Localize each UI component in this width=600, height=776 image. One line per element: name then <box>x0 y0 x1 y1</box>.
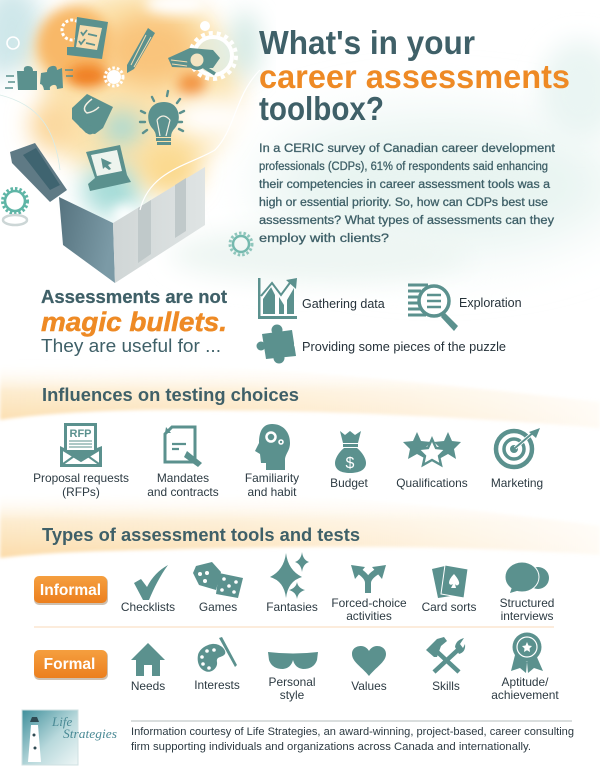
informal: fantasies: Fantasies <box>266 600 318 614</box>
informal: checklists: Checklists <box>121 600 175 614</box>
formal: personal style <box>268 652 318 702</box>
heading: influences: Influences on testing choices <box>42 384 299 405</box>
formal: personal style: style <box>280 688 305 702</box>
icon: projector with magnifier <box>168 48 220 74</box>
icon: dice <box>193 562 243 598</box>
button: informal <box>34 576 108 605</box>
intro paragraph <box>259 141 556 245</box>
influence: qualifications <box>396 432 468 490</box>
footer text: firm supporting individuals and organizations across Canada and internationally. <box>131 741 531 753</box>
informal: games: Games <box>199 600 237 614</box>
icon: puzzle piece <box>256 324 300 364</box>
formal: aptitude: Aptitude/ <box>502 675 549 689</box>
influence: mandates <box>147 427 219 499</box>
intro paragraph: their competencies in career assessment tools was a <box>259 177 550 191</box>
icon: puzzle pieces <box>5 66 73 90</box>
footer text: Information courtesy of Life Strategies, an award-winning, project-based, career consulting <box>131 726 574 738</box>
footer rule <box>131 720 572 722</box>
icon: checklist <box>67 17 108 59</box>
influence: budget <box>330 431 369 490</box>
icon: hammer and wrench <box>426 637 465 672</box>
informal: fantasies <box>266 552 318 614</box>
informal: card sorts: Card sorts <box>422 600 476 614</box>
title: career assessments <box>259 59 570 96</box>
informal: games <box>193 562 243 614</box>
influence: proposal requests: (RFPs) <box>62 485 100 499</box>
icon: money bag: $ <box>346 455 355 472</box>
icon: check mark <box>134 565 168 600</box>
informal: structured interviews: Structured <box>500 596 554 610</box>
title: What's in your <box>259 25 475 62</box>
button: formal <box>34 650 108 680</box>
footer text <box>131 726 574 753</box>
icon: sparkles <box>270 552 309 599</box>
icon: stars <box>403 432 461 465</box>
informal: forced-choice <box>331 565 407 623</box>
influence: proposal requests <box>33 423 129 499</box>
intro paragraph: In a CERIC survey of Canadian career development <box>259 141 556 155</box>
illustration: open toolbox with flying icons <box>0 17 260 283</box>
icon: light bulb <box>140 91 184 145</box>
title <box>259 25 570 128</box>
intro paragraph: assessments? What types of assessments can they <box>259 213 555 227</box>
callout: magic bullets: They are useful for ... <box>41 335 221 356</box>
use: pieces of the puzzle <box>256 324 506 364</box>
icon: sunglasses <box>268 652 318 669</box>
use: pieces of the puzzle: Providing some pieces of the puzzle <box>302 340 506 354</box>
informal: forced-choice: Forced-choice <box>331 596 407 610</box>
intro paragraph: professionals (CDPs), 61% of respondents said enhancing <box>259 159 548 173</box>
icon: handshake <box>72 94 113 134</box>
title: toolbox? <box>259 91 384 128</box>
logo: Life Strategies: Life <box>51 714 72 729</box>
icon: lighthouse <box>28 717 41 762</box>
box lid <box>10 143 67 202</box>
formal: skills <box>426 637 465 693</box>
formal: interests <box>194 637 240 692</box>
decorative gears <box>0 20 260 255</box>
use: gathering data: Gathering data <box>302 297 385 311</box>
informal: card sorts <box>422 565 476 614</box>
icon: house <box>131 643 165 676</box>
informal: structured interviews: interviews <box>501 609 553 623</box>
influence: familiarity: Familiarity <box>245 471 299 485</box>
influence: budget: Budget <box>330 476 369 490</box>
icon: fork arrows <box>351 565 386 593</box>
callout: magic bullets: Assessments are not <box>41 286 227 307</box>
orange band top <box>0 374 598 427</box>
icon: palette <box>198 637 237 672</box>
icon: award ribbon <box>511 632 543 673</box>
use: exploration <box>408 285 522 331</box>
intro paragraph: high or essential priority. So, how can CDPs best use <box>259 195 548 209</box>
heading: types: Types of assessment tools and tests <box>42 524 360 545</box>
influence: familiarity <box>245 424 299 499</box>
formal: needs: Needs <box>131 679 165 693</box>
icon: laptop <box>86 145 131 191</box>
logo: Life Strategies: Strategies <box>63 726 117 741</box>
use: gathering data <box>258 278 385 319</box>
icon: magnifier over lines <box>408 285 458 331</box>
box body <box>59 167 205 283</box>
icon: playing cards <box>432 565 468 598</box>
influence: proposal requests: Proposal requests <box>33 471 129 485</box>
callout: magic bullets <box>41 286 227 356</box>
influence: qualifications: Qualifications <box>396 476 468 490</box>
formal: values <box>351 646 387 693</box>
icon: head with gears <box>255 424 290 470</box>
formal: aptitude <box>491 632 559 702</box>
icon: document with pen <box>165 427 202 467</box>
button: formal: Formal <box>44 656 95 673</box>
formal: needs <box>131 643 165 693</box>
icon: chart <box>258 278 297 319</box>
intro paragraph: employ with clients? <box>259 231 389 245</box>
callout: magic bullets: magic bullets. <box>41 307 227 337</box>
icon: target <box>496 428 540 467</box>
influence: mandates: and contracts <box>147 485 219 499</box>
divider <box>34 626 554 628</box>
formal: values: Values <box>351 679 387 693</box>
informal: forced-choice: activities <box>346 609 392 623</box>
informal: checklists <box>121 565 175 614</box>
informal: structured interviews <box>500 562 554 623</box>
orange band bottom <box>0 504 598 560</box>
formal: interests: Interests <box>194 678 240 692</box>
influence: mandates: Mandates <box>157 471 209 485</box>
formal: aptitude: achievement <box>491 688 559 702</box>
influence: familiarity: and habit <box>248 485 297 499</box>
logo: Life Strategies <box>22 710 117 765</box>
button: informal: Informal <box>40 582 101 599</box>
formal: skills: Skills <box>432 679 460 693</box>
icon: speech bubbles <box>505 562 549 593</box>
influence: marketing: Marketing <box>491 476 543 490</box>
influence: marketing <box>491 428 543 490</box>
icon: RFP envelope: RFP <box>70 428 92 440</box>
icon: pencil <box>127 28 155 73</box>
formal: personal style: Personal <box>269 675 315 689</box>
use: exploration: Exploration <box>459 296 522 310</box>
icon: heart <box>352 646 386 676</box>
